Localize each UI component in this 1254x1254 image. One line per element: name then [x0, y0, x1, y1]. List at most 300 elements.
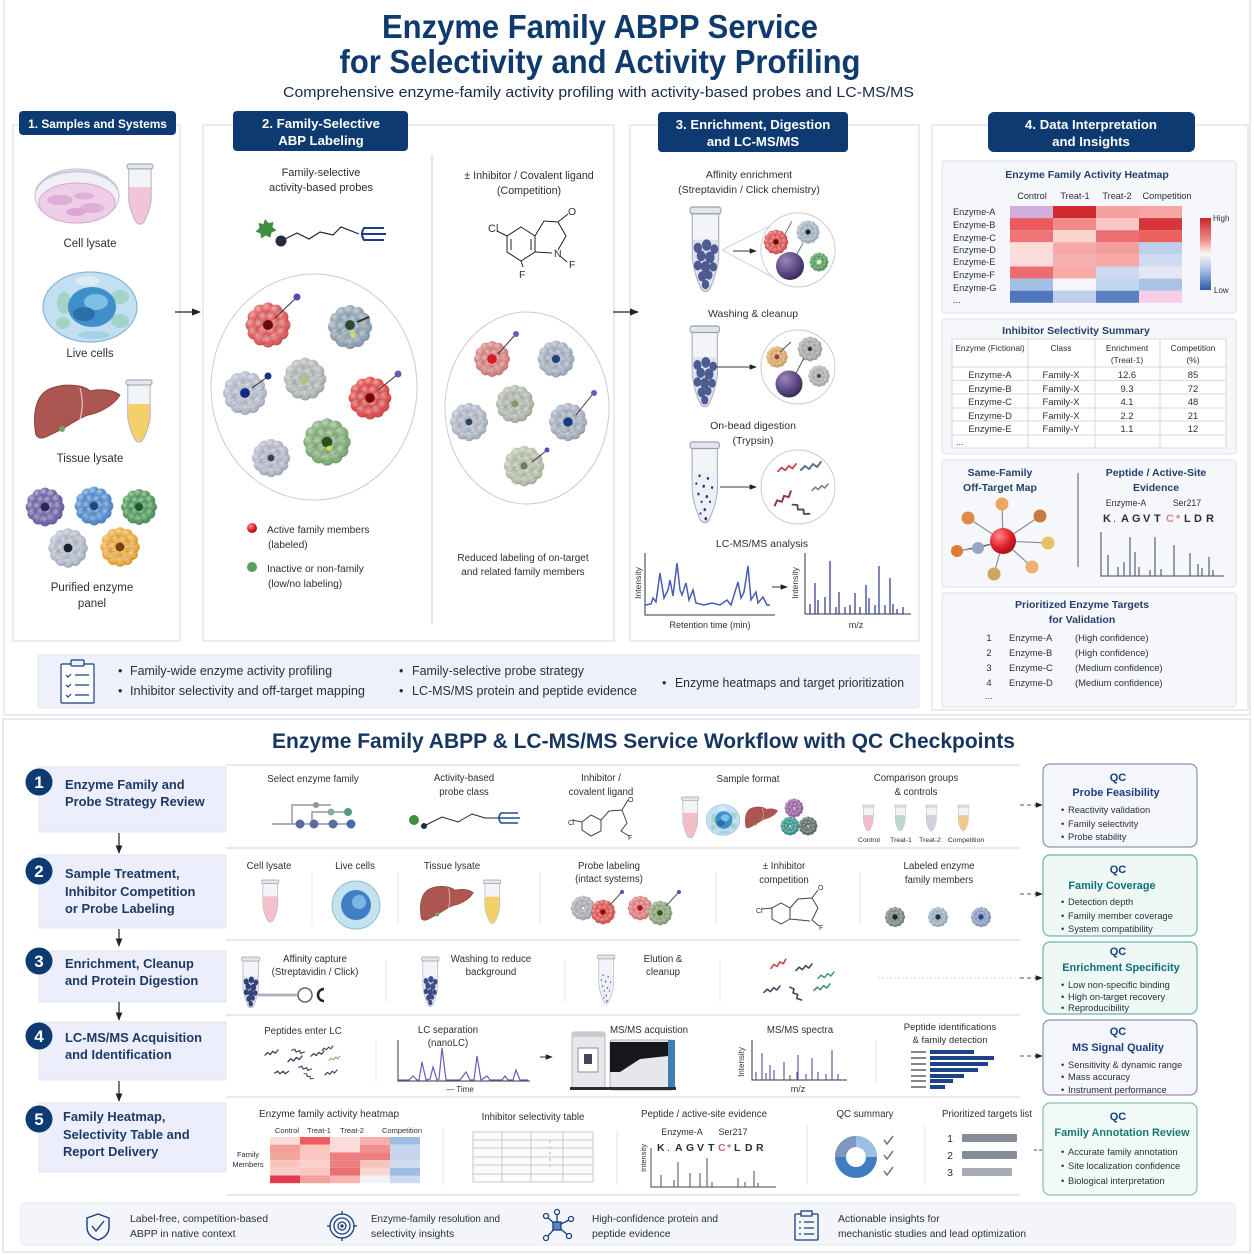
QC box: family coverage: System compatibility [1068, 924, 1153, 934]
summary band: service highlights: • [399, 664, 403, 678]
heading: data interpretation: and Insights [1052, 134, 1130, 149]
row 5 content: reporting: Family [237, 1150, 259, 1159]
row 1 content: strategy review: Comparison groups [874, 773, 958, 784]
icon: sample formats [682, 797, 817, 838]
text: actionable insights: Actionable insights for [838, 1214, 940, 1225]
icon: inhibitor ligand: O [818, 885, 824, 892]
QC box: MS signal quality: Sensitivity & dynamic range [1068, 1060, 1182, 1070]
chart: MS/MS spectrum: Intensity [737, 1047, 746, 1077]
summary band: service highlights: LC-MS/MS protein and peptide evidence [412, 684, 637, 698]
text: reduced labeling [457, 553, 589, 578]
QC box: probe feasibility: QC [1110, 772, 1126, 784]
row 4 content: LC-MS/MS: LC separation [418, 1025, 478, 1036]
icon: small probe [409, 813, 520, 829]
row 2 content: sample treatment [247, 861, 991, 932]
panel: data interpretation and insights [932, 112, 1248, 710]
chart: small peptide spectrum [639, 1144, 776, 1187]
card: enzyme family activity heatmap: Competition [1142, 191, 1192, 201]
QC box: family annotation review: • [1061, 1176, 1064, 1186]
arrow: step 3 to 4 [118, 1002, 120, 1020]
arrow: step 1 to 2 [118, 833, 120, 853]
card: inhibitor selectivity summary: Enzyme-D [968, 410, 1012, 421]
row 1 content: strategy review: Inhibitor / [581, 773, 621, 784]
heatmap colour scale: High [1213, 214, 1229, 223]
icon: inhibitor molecule: N [554, 248, 562, 260]
peptide sequence: G [1132, 513, 1141, 525]
icon: liver and tissue lysate tube [35, 380, 152, 442]
card: enzyme family activity heatmap: Enzyme Family Activity Heatmap [1005, 169, 1169, 181]
QC box: probe feasibility: Probe Feasibility [1072, 787, 1160, 799]
card: enzyme family activity heatmap: Enzyme-A [953, 207, 996, 217]
peptide sequence: T [1154, 513, 1161, 525]
card: enzyme family activity heatmap: Enzyme-B [953, 220, 995, 230]
card: off-target map and peptide evidence: Ser217 [1173, 498, 1201, 508]
card: prioritized enzyme targets: (High confidence) [1075, 632, 1148, 643]
icon: comparison tubes: Treat-2 [919, 837, 941, 844]
summary band: service highlights: • [118, 664, 122, 678]
icon: mass spectrometer [570, 1032, 676, 1090]
chart: LC chromatogram: — Time [446, 1085, 474, 1094]
peptide sequence: K [1103, 513, 1111, 525]
step 5 box: Report Delivery [63, 1144, 159, 1159]
card: enzyme family activity heatmap: Treat-2 [1102, 191, 1132, 201]
card: prioritized enzyme targets: (High confidence) [1075, 647, 1148, 658]
summary band: service highlights: Family-selective probe strategy [412, 664, 585, 678]
card: inhibitor selectivity summary: Enzyme-A [968, 369, 1012, 380]
text: actionable insights: mechanistic studies and lead optimization [838, 1229, 1026, 1240]
peptide sequence: * [1176, 513, 1181, 525]
card: enzyme family activity heatmap: Enzyme-D [953, 245, 996, 255]
card: inhibitor selectivity summary: (%) [1186, 355, 1200, 365]
icon: small ligand: Cl [568, 820, 575, 827]
row 3 content: enrichment: Affinity capture [283, 954, 347, 965]
icon: activity-based probe [256, 219, 386, 246]
step 4 box: 4 [34, 1027, 44, 1046]
summary band: service highlights: Enzyme heatmaps and target prioritization [675, 676, 904, 690]
QC box: probe feasibility: Probe stability [1068, 832, 1127, 842]
label: washing and cleanup: Washing & cleanup [708, 308, 798, 320]
card: off-target map and peptide evidence: Enzyme-A [1106, 498, 1146, 508]
card: prioritized enzyme targets: 3 [986, 662, 992, 673]
QC box: MS signal quality: MS Signal Quality [1072, 1042, 1164, 1054]
row 2 content: sample treatment: Cell lysate [247, 861, 291, 872]
step 5 box: Family Heatmap, [63, 1109, 165, 1124]
upper panel background [4, 0, 1250, 715]
row 2 content: sample treatment: family members [905, 875, 973, 886]
chart: LC chromatogram [398, 1040, 530, 1094]
arrow: labeling to enrichment [613, 311, 638, 313]
step 5 box: 5 [34, 1110, 44, 1129]
QC box: MS signal quality: QC [1110, 1026, 1126, 1038]
small table [473, 1132, 593, 1182]
heatmap colour scale [1200, 214, 1229, 295]
row 3 content: enrichment: Washing to reduce [451, 954, 531, 965]
row 5 content: reporting [232, 1109, 1032, 1187]
step 2 box: 2 [34, 862, 44, 881]
text: family-selective probes: activity-based probes [269, 182, 373, 194]
icon: digested peptides [764, 959, 834, 1002]
QC box: MS signal quality: • [1061, 1072, 1064, 1082]
row 2 content: sample treatment: competition [759, 875, 809, 886]
population circle: competition [445, 312, 609, 504]
card: enzyme family activity heatmap: ... [953, 295, 961, 305]
workflow title: Enzyme Family ABPP & LC-MS/MS Service Workflow with QC Checkpoints [272, 729, 1015, 753]
peptide sequence small: . [667, 1142, 670, 1154]
card: inhibitor selectivity summary: 48 [1188, 396, 1198, 407]
icon: clipboard [61, 660, 94, 703]
label: tissue lysate: Tissue lysate [57, 453, 123, 465]
arrow: LC to MS [772, 586, 787, 588]
step 1 box [26, 767, 226, 832]
label: on-bead digestion: (Trypsin) [732, 435, 774, 447]
step 3 box [26, 948, 226, 1002]
card: prioritized enzyme targets: Prioritized Enzyme Targets [1015, 599, 1149, 611]
icon: shield [87, 1214, 109, 1240]
QC box: family annotation review: Site localization confidence [1068, 1161, 1180, 1171]
row 3 content: enrichment: (Streptavidin / Click) [272, 967, 358, 978]
summary band: service highlights: Family-wide enzyme activity profiling [130, 664, 332, 678]
card: inhibitor selectivity summary: ... [956, 437, 964, 447]
icon: inhibitor ligand: Cl [756, 908, 763, 915]
icon: live cell [43, 272, 137, 342]
step 3 box: Enrichment, Cleanup [65, 956, 194, 971]
step 2 box: or Probe Labeling [65, 901, 175, 916]
chart: MS/MS spectrum: m/z [791, 1084, 806, 1094]
row 5 content: reporting: Treat-2 [340, 1126, 364, 1135]
QC box: family coverage: Family Coverage [1068, 880, 1156, 892]
text: inhibitor competition: ± Inhibitor / Covalent ligand [464, 170, 594, 182]
QC box: MS signal quality: Instrument performance [1068, 1085, 1167, 1095]
arrow: step 2 to 3 [118, 929, 120, 946]
chart: MS spectrum: m/z [849, 620, 864, 630]
QC box: enrichment specificity: High on-target recovery [1068, 992, 1165, 1002]
icon: small ligand: F [628, 835, 632, 842]
small heatmap [270, 1137, 420, 1183]
heading: enrichment: and LC-MS/MS [707, 134, 799, 149]
text: inhibitor competition: (Competition) [497, 185, 561, 197]
row 1 content: strategy review: Sample format [716, 774, 780, 785]
text: reduced labeling: and related family members [461, 567, 585, 578]
icon: network [544, 1210, 574, 1240]
heading: enrichment: 3. Enrichment, Digestion [676, 117, 830, 132]
QC box: enrichment specificity [1043, 942, 1197, 1014]
peptide sequence [1103, 513, 1214, 525]
card: prioritized enzyme targets: 1 [986, 632, 992, 643]
label: affinity enrichment: Affinity enrichment [706, 169, 792, 181]
text: high-confidence evidence: High-confidence protein and [592, 1214, 718, 1225]
row 5 content: reporting: Prioritized targets list [942, 1109, 1032, 1120]
card: prioritized enzyme targets: 4 [986, 677, 992, 688]
row 5 content: reporting: Peptide / active-site evidence [641, 1109, 767, 1120]
card: inhibitor selectivity summary: Family-X [1043, 396, 1080, 407]
row 4 content: LC-MS/MS: Peptides enter LC [264, 1026, 342, 1037]
peptide sequence: L [1184, 513, 1191, 525]
dashed connectors to QC boxes [1020, 805, 1042, 1150]
subtitle: Comprehensive enzyme-family activity profiling with activity-based probes and LC-MS/MS [283, 84, 914, 101]
card: inhibitor selectivity summary: Family-Y [1043, 423, 1080, 434]
icon: inhibitor molecule: O [568, 206, 576, 218]
chart: peptide identification bars [911, 1050, 994, 1089]
QC box: family annotation review: Accurate family annotation [1068, 1147, 1178, 1157]
icon: purified enzyme panel [26, 487, 157, 568]
card: inhibitor selectivity summary: Enzyme-C [968, 396, 1012, 407]
card: inhibitor selectivity summary: Inhibitor Selectivity Summary [1002, 325, 1150, 337]
panel: samples and systems [13, 111, 180, 641]
population circle: labeled enzymes [211, 274, 417, 500]
label: on-bead digestion [710, 420, 796, 447]
step 2 box [26, 855, 226, 928]
heading: samples and systems [19, 111, 176, 135]
QC box: enrichment specificity: • [1061, 992, 1064, 1002]
text: high-confidence evidence: peptide evidence [592, 1229, 671, 1240]
QC box: enrichment specificity: Reproducibility [1068, 1003, 1129, 1013]
card: prioritized enzyme targets: (Medium confidence) [1075, 677, 1163, 688]
digestion illustration [690, 442, 835, 524]
summary band: service highlights: • [662, 676, 666, 690]
QC box: family coverage [1043, 855, 1197, 936]
lower panel background [3, 719, 1250, 1252]
QC box: MS signal quality: Mass accuracy [1068, 1072, 1130, 1082]
row 1 content: strategy review: Select enzyme family [267, 774, 359, 785]
chart: MS spectrum [790, 553, 911, 630]
footer band: value highlights [21, 1203, 1235, 1245]
icon: inhibitor molecule [488, 206, 576, 281]
arrow: LC to MS instrument [540, 1056, 552, 1058]
heading: data interpretation: 4. Data Interpretation [1025, 117, 1157, 132]
row 1 content: strategy review: covalent ligand [569, 787, 633, 798]
QC box: probe feasibility: • [1061, 832, 1064, 842]
label: affinity enrichment [678, 169, 820, 196]
icon: peptides [265, 1046, 340, 1081]
summary band: service highlights: Inhibitor selectivity and off-target mapping [130, 684, 365, 698]
title: for Selectivity and Activity Profiling [340, 43, 860, 80]
row 4 content: LC-MS/MS: Peptide identifications [904, 1022, 996, 1033]
chart: MS/MS spectrum [737, 1040, 847, 1094]
card: inhibitor selectivity summary: 12 [1188, 423, 1198, 434]
heading: data interpretation [988, 112, 1195, 152]
step 2 box: Sample Treatment, [65, 866, 180, 881]
title [340, 8, 860, 80]
row 2 content: sample treatment: ± Inhibitor [763, 861, 806, 872]
card: inhibitor selectivity summary: 12.6 [1118, 369, 1136, 380]
peptide sequence small: G [686, 1142, 694, 1154]
list: prioritized targets: 1 [947, 1133, 953, 1145]
card: inhibitor selectivity summary: Enzyme (Fictional) [955, 343, 1025, 353]
peptide sequence small: * [727, 1142, 732, 1154]
card: off-target map and peptide evidence: Same-Family [968, 467, 1033, 479]
label: affinity enrichment: (Streptavidin / Click chemistry) [678, 184, 820, 196]
text: high-confidence evidence [592, 1214, 718, 1240]
row 5 content: reporting: QC summary [836, 1109, 894, 1120]
QC box: enrichment specificity: • [1061, 1003, 1064, 1013]
peptide sequence small: V [697, 1142, 704, 1154]
peptide sequence: R [1206, 513, 1214, 525]
label: purified enzyme panel: Purified enzyme [51, 582, 133, 594]
card: prioritized enzyme targets: Enzyme-C [1009, 662, 1053, 673]
row 4 content: LC-MS/MS: (nanoLC) [428, 1038, 468, 1049]
step 4 box [26, 1022, 226, 1080]
peptide sequence small: T [708, 1142, 715, 1154]
peptide sequence small: A [675, 1142, 683, 1154]
legend: active family members [247, 523, 369, 551]
icon: inhibitor molecule: Cl [488, 223, 498, 235]
text: inhibitor competition [464, 170, 594, 197]
row 5 content: reporting: Enzyme-A [661, 1127, 703, 1137]
peptide sequence: D [1194, 513, 1202, 525]
peptide sequence small: K [657, 1142, 665, 1154]
card: enzyme family activity heatmap: Treat-1 [1060, 191, 1090, 201]
QC box: family annotation review: • [1061, 1161, 1064, 1171]
icon: inhibitor molecule: F [569, 259, 575, 271]
card: prioritized enzyme targets [942, 593, 1236, 707]
icon: petri dish with cell lysate tube [35, 164, 153, 224]
row 2 content: sample treatment: Tissue lysate [424, 861, 480, 872]
icon: inhibitor ligand: F [819, 925, 823, 932]
QC box: enrichment specificity: • [1061, 980, 1064, 990]
peptide sequence: . [1113, 513, 1116, 525]
chart: retention time trace: Retention time (min) [669, 620, 751, 630]
QC box: MS signal quality: • [1061, 1060, 1064, 1070]
arrow: samples to labeling [175, 311, 200, 313]
row 5 content: reporting: Ser217 [718, 1127, 748, 1137]
row 3 content: enrichment: background [466, 967, 516, 978]
legend: active family members: Active family members [267, 525, 369, 536]
summary band: service highlights: • [118, 684, 122, 698]
row 1 content: strategy review: Activity-based [434, 773, 494, 784]
list: prioritized targets: 2 [947, 1150, 953, 1162]
text: family-selective probes [269, 167, 373, 194]
row 3 content: enrichment: Elution & [644, 954, 683, 965]
affinity enrichment illustration [690, 207, 835, 291]
QC box: family annotation review: Biological interpretation [1068, 1176, 1165, 1186]
card: enzyme family activity heatmap: Enzyme-C [953, 233, 996, 243]
panel: family-selective ABP labeling [203, 111, 614, 641]
row 1 content: strategy review: probe class [439, 787, 489, 798]
step 1 box: Enzyme Family and [65, 777, 185, 792]
card: inhibitor selectivity summary: Enzyme-B [968, 383, 1012, 394]
card: inhibitor selectivity summary: (Treat-1) [1111, 355, 1143, 365]
row 4 content: LC-MS/MS: MS/MS acquistion [610, 1025, 688, 1036]
text: enzyme-family resolution: Enzyme-family resolution and [371, 1214, 500, 1225]
row 5 content: reporting: Competition [382, 1126, 422, 1135]
heading: enrichment [658, 112, 848, 152]
card: prioritized enzyme targets: ... [985, 691, 993, 701]
row 4 content: LC-MS/MS: & family detection [913, 1035, 987, 1046]
legend: inactive or non-family: Inactive or non-family [267, 564, 365, 575]
QC box: MS signal quality: • [1061, 1085, 1064, 1095]
icon: labeled enzymes [885, 907, 991, 927]
card: inhibitor selectivity summary: 9.3 [1120, 383, 1134, 394]
card: off-target map and peptide evidence: Off-Target Map [963, 482, 1037, 494]
step 4 box: LC-MS/MS Acquisition [65, 1030, 202, 1045]
row 4 content: LC-MS/MS [264, 1022, 996, 1094]
text: enzyme-family resolution [371, 1214, 500, 1240]
peptide sequence small: L [734, 1142, 741, 1154]
card: inhibitor selectivity summary: Enzyme-E [968, 423, 1012, 434]
list: prioritized targets: 3 [947, 1167, 953, 1179]
icon: report clipboard [795, 1211, 818, 1240]
step 4 box: and Identification [65, 1047, 172, 1062]
card: enzyme family activity heatmap: Enzyme-E [953, 257, 995, 267]
heatmap cells [1010, 206, 1182, 303]
icon: enzyme family tree [272, 802, 356, 828]
text: label-free: Label-free, competition-based [130, 1214, 268, 1225]
label: on-bead digestion: On-bead digestion [710, 420, 796, 432]
QC box: family annotation review: Family Annotation Review [1054, 1127, 1190, 1139]
text: label-free: ABPP in native context [130, 1229, 236, 1240]
QC box: probe feasibility: Reactivity validation [1068, 805, 1150, 815]
card: inhibitor selectivity summary: Class [1051, 343, 1071, 353]
card: prioritized enzyme targets: (Medium confidence) [1075, 662, 1163, 673]
row 2 content: sample treatment: (intact systems) [575, 874, 643, 885]
icon: comparison tubes: Control [858, 837, 880, 844]
label: purified enzyme panel: panel [78, 598, 106, 610]
row 4 content: LC-MS/MS: MS/MS spectra [767, 1025, 834, 1036]
icon: small ligand: O [628, 797, 634, 804]
label: live cells: Live cells [66, 348, 114, 360]
row 5 content: reporting: Members [232, 1160, 264, 1169]
card: prioritized enzyme targets: Enzyme-D [1009, 677, 1053, 688]
row 3 content: enrichment [242, 954, 1020, 1008]
panel: enrichment, digestion and LC-MS/MS [630, 112, 919, 641]
QC box: family coverage: Detection depth [1068, 897, 1133, 907]
QC box: family coverage: Family member coverage [1068, 911, 1173, 921]
step 3 box: and Protein Digestion [65, 973, 198, 988]
card: inhibitor selectivity summary [942, 319, 1236, 454]
card: inhibitor selectivity summary: 21 [1188, 410, 1198, 421]
card: inhibitor selectivity summary: Family-X [1043, 369, 1080, 380]
icon: inhibitor molecule: F [519, 269, 525, 281]
icon: small ligand [568, 797, 634, 842]
row 3 content: enrichment: cleanup [646, 967, 680, 978]
step 3 box: 3 [34, 952, 44, 971]
chart: retention time trace [633, 553, 775, 630]
QC box: family coverage: • [1061, 924, 1064, 934]
row 5 content: reporting: Enzyme family activity heatmap [259, 1109, 399, 1120]
label: cell lysate: Cell lysate [63, 238, 117, 250]
label: LC-MS/MS analysis: LC-MS/MS analysis [716, 538, 808, 550]
QC box: enrichment specificity: Low non-specific binding [1068, 980, 1170, 990]
peptide sequence: A [1121, 513, 1129, 525]
heading: samples and systems: 1. Samples and Systems [28, 117, 167, 131]
step 2 box: Inhibitor Competition [65, 884, 195, 899]
card: prioritized enzyme targets: Enzyme-A [1009, 632, 1053, 643]
peptide sequence small [657, 1142, 764, 1154]
step 5 box [26, 1103, 226, 1172]
arrow: step 4 to 5 [118, 1081, 120, 1101]
QC box: family annotation review [1043, 1103, 1197, 1195]
icon: comparison tubes: Competition [948, 837, 984, 844]
chart: small peptide spectrum: Intensity [639, 1144, 648, 1172]
card: enzyme family activity heatmap: Control [1017, 191, 1047, 201]
peptide sequence small: D [745, 1142, 753, 1154]
icon: target [327, 1211, 357, 1241]
card: enzyme family activity heatmap: Enzyme-F [953, 270, 995, 280]
QC box: enrichment specificity: QC [1110, 946, 1126, 958]
legend: inactive or non-family [247, 562, 365, 590]
row 5 content: reporting: Treat-1 [307, 1126, 331, 1135]
row 1 content: strategy review: & controls [894, 787, 938, 798]
peptide sequence: C [1166, 513, 1174, 525]
peptide sequence: V [1143, 513, 1151, 525]
card: inhibitor selectivity summary: 4.1 [1120, 396, 1134, 407]
chart: retention time trace: Intensity [633, 566, 643, 599]
washing illustration [690, 326, 835, 407]
row 2 content: sample treatment: Labeled enzyme [903, 861, 975, 872]
heatmap colour scale: Low [1214, 286, 1229, 295]
QC box: family coverage: QC [1110, 864, 1126, 876]
network: off-target map [951, 498, 1054, 580]
